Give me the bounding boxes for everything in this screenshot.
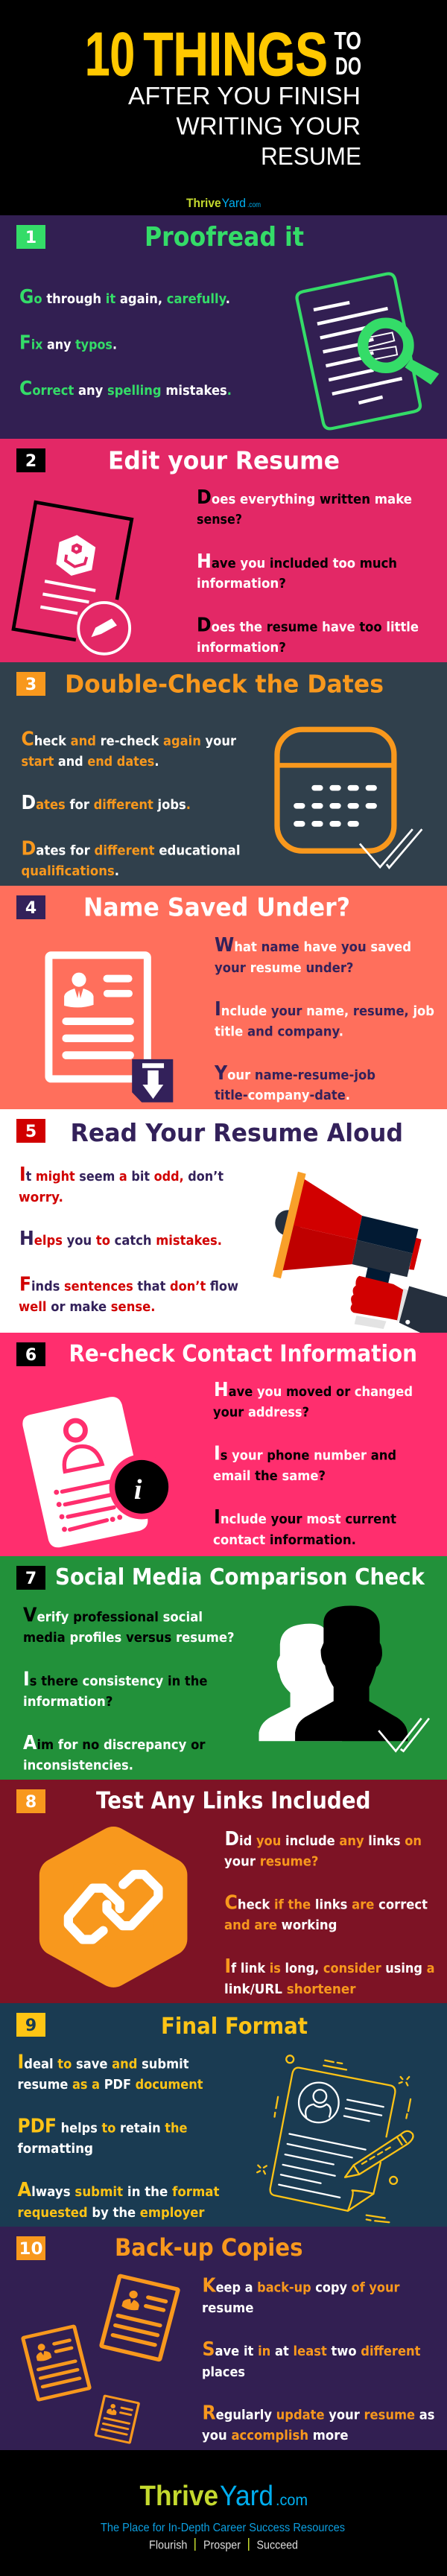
number badge 4 [16,895,45,919]
heading: Double-Check the Dates [65,669,384,699]
text block: Is there consistency in the [23,1669,207,1691]
icon: edit document [13,502,132,654]
subtitle: AFTER YOU FINISH [128,82,361,110]
text block [21,729,240,879]
text block [19,286,232,400]
text block: Have you included too much [197,551,397,573]
text block: formatting [18,2141,93,2157]
title: to do: DO [335,52,361,80]
heading: Read Your Resume Aloud [70,1118,403,1147]
text block: sense? [197,512,242,527]
text block: information? [197,640,286,656]
text block: Fix any typos. [19,332,117,355]
heading: Final Format [161,2014,308,2040]
icon: resume line art with pencil [257,2055,413,2222]
number badge 5: 5 [25,1123,37,1141]
logo: .com [247,201,261,209]
icon: two profile silhouettes [259,1605,429,1751]
logo: Yard [222,196,246,210]
heading: Proofread it [145,222,304,253]
text block: title and company. [215,1024,343,1040]
text block: Dates for different jobs. [21,792,191,814]
number badge 8: 8 [25,1793,37,1812]
flourish prosper succeed: Prosper [203,2539,241,2552]
title: 10 things [85,19,328,89]
number badge 6: 6 [25,1346,37,1365]
title: to do: TO [334,27,361,54]
footer logo: .com [276,2492,308,2509]
text block: places [202,2364,245,2380]
text block [224,1828,435,1997]
panel 2: edit your resume [0,439,447,662]
heading: Re-check Contact Information [69,1341,417,1368]
number badge 10 [16,2236,45,2260]
icon: contact card with info: i [134,1474,142,1506]
footer logo: Thrive [140,2481,218,2512]
text block: your address? [213,1405,309,1420]
text block [214,934,434,1103]
text block: Does the resume have too little [197,614,419,636]
text block: contact information. [213,1532,356,1548]
text block: What name have you saved [215,934,411,957]
panel 3: double-check the dates [0,662,447,886]
number badge 2: 2 [25,452,37,471]
text block: Is your phone number and [214,1442,396,1465]
text block: information? [23,1694,113,1710]
text block: PDF helps to retain the [18,2116,188,2138]
text block: media profiles versus resume? [23,1630,234,1646]
text block [197,486,419,656]
heading: Social Media Comparison Check [55,1564,425,1590]
text block [202,2275,435,2443]
text block: link/URL shortener [224,1982,356,1997]
subtitle: WRITING YOUR [176,112,361,140]
text block: you accomplish more [202,2428,349,2443]
number badge 4: 4 [25,899,37,918]
number badge 5 [16,1119,45,1143]
icon: resume with download [48,955,173,1103]
icon: calendar [277,729,422,868]
heading: Name Saved Under? [83,892,350,922]
panel 8: test any links included [0,1780,447,2003]
flourish prosper succeed: Succeed [256,2539,298,2552]
subtitle: RESUME [261,142,361,170]
text block: title-company-date. [215,1088,350,1103]
subtitle [128,82,361,170]
number badge 7: 7 [25,1570,37,1588]
text block: Include your name, resume, job [215,998,434,1021]
text block: Finds sentences that don’t flow [19,1274,238,1296]
text block: Save it in at least two different [203,2338,421,2361]
panel 9: final format [0,2003,447,2227]
text block: Go through it again, carefully. [19,286,230,308]
icon: chain link hexagon [57,1844,170,1970]
text block: information? [197,576,286,591]
icon: contact card with info [22,1397,174,1547]
text block: Have you moved or changed [214,1379,413,1401]
icon: megaphone with hand [273,1172,447,1333]
text block: Include your most current [214,1506,396,1529]
text block: your resume under? [215,960,353,976]
text block: Correct any spelling mistakes. [19,378,232,400]
text block [213,1379,413,1548]
text block: Does everything written make [197,486,412,509]
text block: Your name-resume-job [214,1062,375,1085]
number badge 3 [16,672,45,696]
number badge 6 [16,1342,45,1366]
text block: Keep a back-up copy of your [203,2275,400,2297]
text block: well or make sense. [19,1299,155,1315]
text block [23,1605,234,1773]
number badge 1 [16,225,45,249]
number badge 10: 10 [19,2240,43,2259]
text block: resume [202,2300,253,2316]
icon: three resume copies [23,2276,178,2443]
heading: Edit your Resume [108,445,340,475]
text block: It might seem a bit odd, don’t [19,1164,224,1186]
number badge 1: 1 [25,229,37,247]
text block: start and end dates. [21,754,159,770]
text block: worry. [19,1190,63,1205]
tagline: The Place for In-Depth Career Success Resources [101,2522,345,2534]
logo [186,196,261,210]
flourish prosper succeed [149,2538,298,2552]
text block: Regularly update your resume as [203,2402,435,2424]
text block: inconsistencies. [23,1758,133,1773]
text block: qualifications. [21,863,119,879]
text block: Check and re-check again your [21,729,236,751]
text block: Always submit in the format [18,2179,220,2201]
number badge 9 [16,2013,45,2037]
header panel [0,0,447,215]
text block: Ideal to save and submit [18,2052,189,2074]
text block: email the same? [213,1468,326,1484]
number badge 7 [16,1566,45,1590]
text block: Verify professional social [23,1605,203,1627]
number badge 8 [16,1789,45,1813]
text block [19,1164,238,1315]
text block: and are working [224,1917,337,1933]
logo: Thrive [186,196,221,210]
number badge 9: 9 [25,2017,37,2035]
text block: Aim for no discrepancy or [23,1732,206,1754]
panel 7: social media comparison check [0,1556,447,1780]
panel 10: back-up copies [0,2227,447,2450]
number badge 2 [16,448,45,472]
text block: requested by the employer [18,2205,205,2221]
footer logo [140,2481,308,2512]
panel 4: name saved under [0,886,447,1109]
footer panel [0,2450,447,2576]
title: 10 things: 10 [85,19,135,89]
text block: Did you include any links on [225,1828,422,1850]
text block: Check if the links are correct [225,1892,428,1914]
text block: resume as a PDF document [18,2077,203,2093]
icon: document with magnifier [297,273,439,428]
number badge 3: 3 [25,676,37,694]
panel 1: proofread it [0,215,447,439]
heading: Test Any Links Included [96,1788,371,1815]
title: 10 things: THINGS [143,19,328,89]
heading: Back-up Copies [115,2233,302,2262]
text block: Dates for different educational [21,837,240,860]
title: to do [334,27,361,80]
text block: your resume? [224,1853,319,1870]
text block: If link is long, consider using a [225,1955,435,1978]
flourish prosper succeed: Flourish [149,2539,188,2552]
text block: Helps you to catch mistakes. [19,1228,222,1250]
text block [18,2052,220,2221]
footer logo: Yard [220,2481,273,2512]
panel 5: read your resume aloud [0,1109,447,1333]
panel 6: re-check contact information [0,1333,447,1556]
